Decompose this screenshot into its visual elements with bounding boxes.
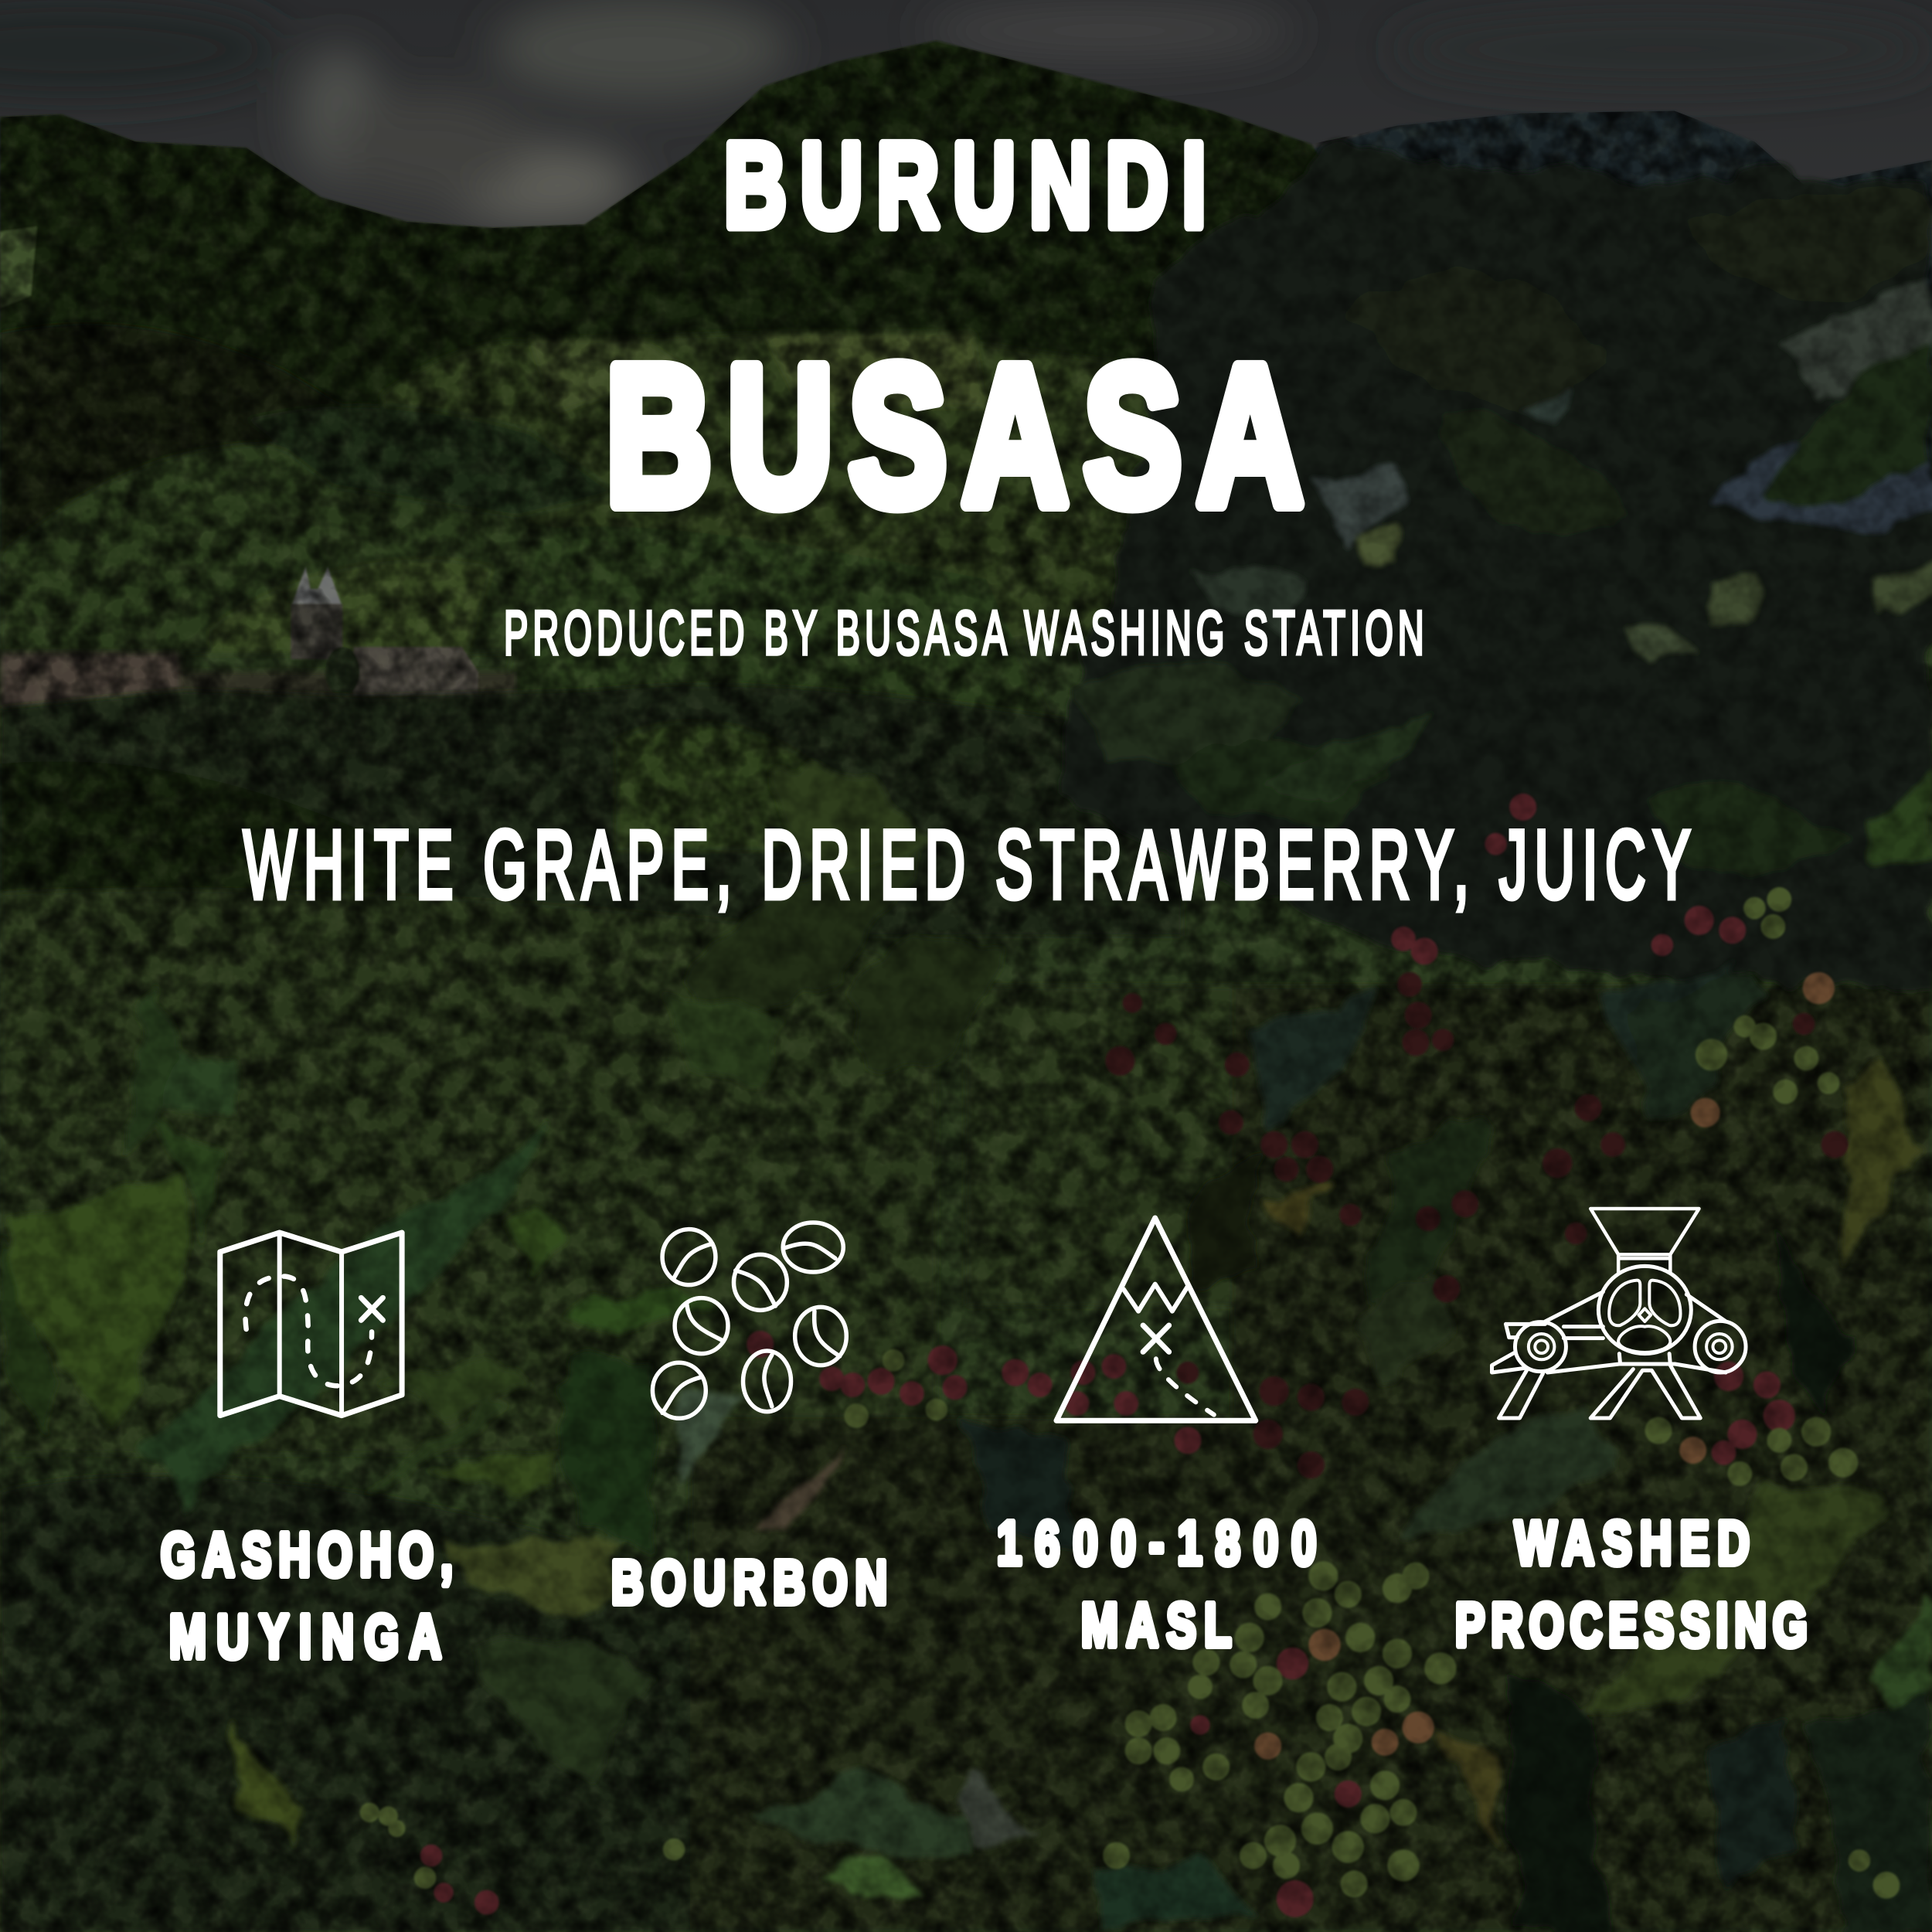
tasting notes: WHITE GRAPE, DRIED STRAWBERRY, JUICY (243, 811, 1690, 919)
church (291, 566, 478, 696)
valley patches behind leaves and coffee leaf mass (1060, 145, 1932, 986)
producer line: PRODUCED BY BUSASA WASHING STATION (504, 598, 1424, 668)
label: altitude: MASL (1081, 1590, 1231, 1659)
label: origin (161, 1520, 453, 1671)
label: processing: WASHED (1515, 1509, 1750, 1577)
label: processing: PROCESSING (1455, 1590, 1808, 1659)
label: processing (1455, 1509, 1808, 1659)
nearby leaves on the coffee side (690, 761, 1932, 1932)
icon: coffee pulping machine (1492, 1209, 1746, 1418)
label: altitude (997, 1509, 1316, 1659)
forest and fields base (0, 685, 1932, 1932)
title: coffee name: BUSASA (606, 325, 1303, 546)
icon: coffee beans (652, 1223, 846, 1418)
label: origin: MUYINGA (169, 1602, 441, 1671)
clouds (0, 0, 1932, 224)
banana leaves (0, 986, 966, 1896)
heading: origin: BURUNDI (724, 118, 1206, 252)
label: variety: BOURBON (611, 1548, 887, 1617)
icon: mountain with route (1056, 1218, 1256, 1420)
icon: folded map with route (220, 1233, 402, 1416)
label: altitude: 1600-1800 (997, 1509, 1316, 1577)
coffee berries (360, 794, 1900, 1917)
mountains (0, 41, 1932, 591)
label: origin: GASHOHO, (161, 1520, 453, 1589)
